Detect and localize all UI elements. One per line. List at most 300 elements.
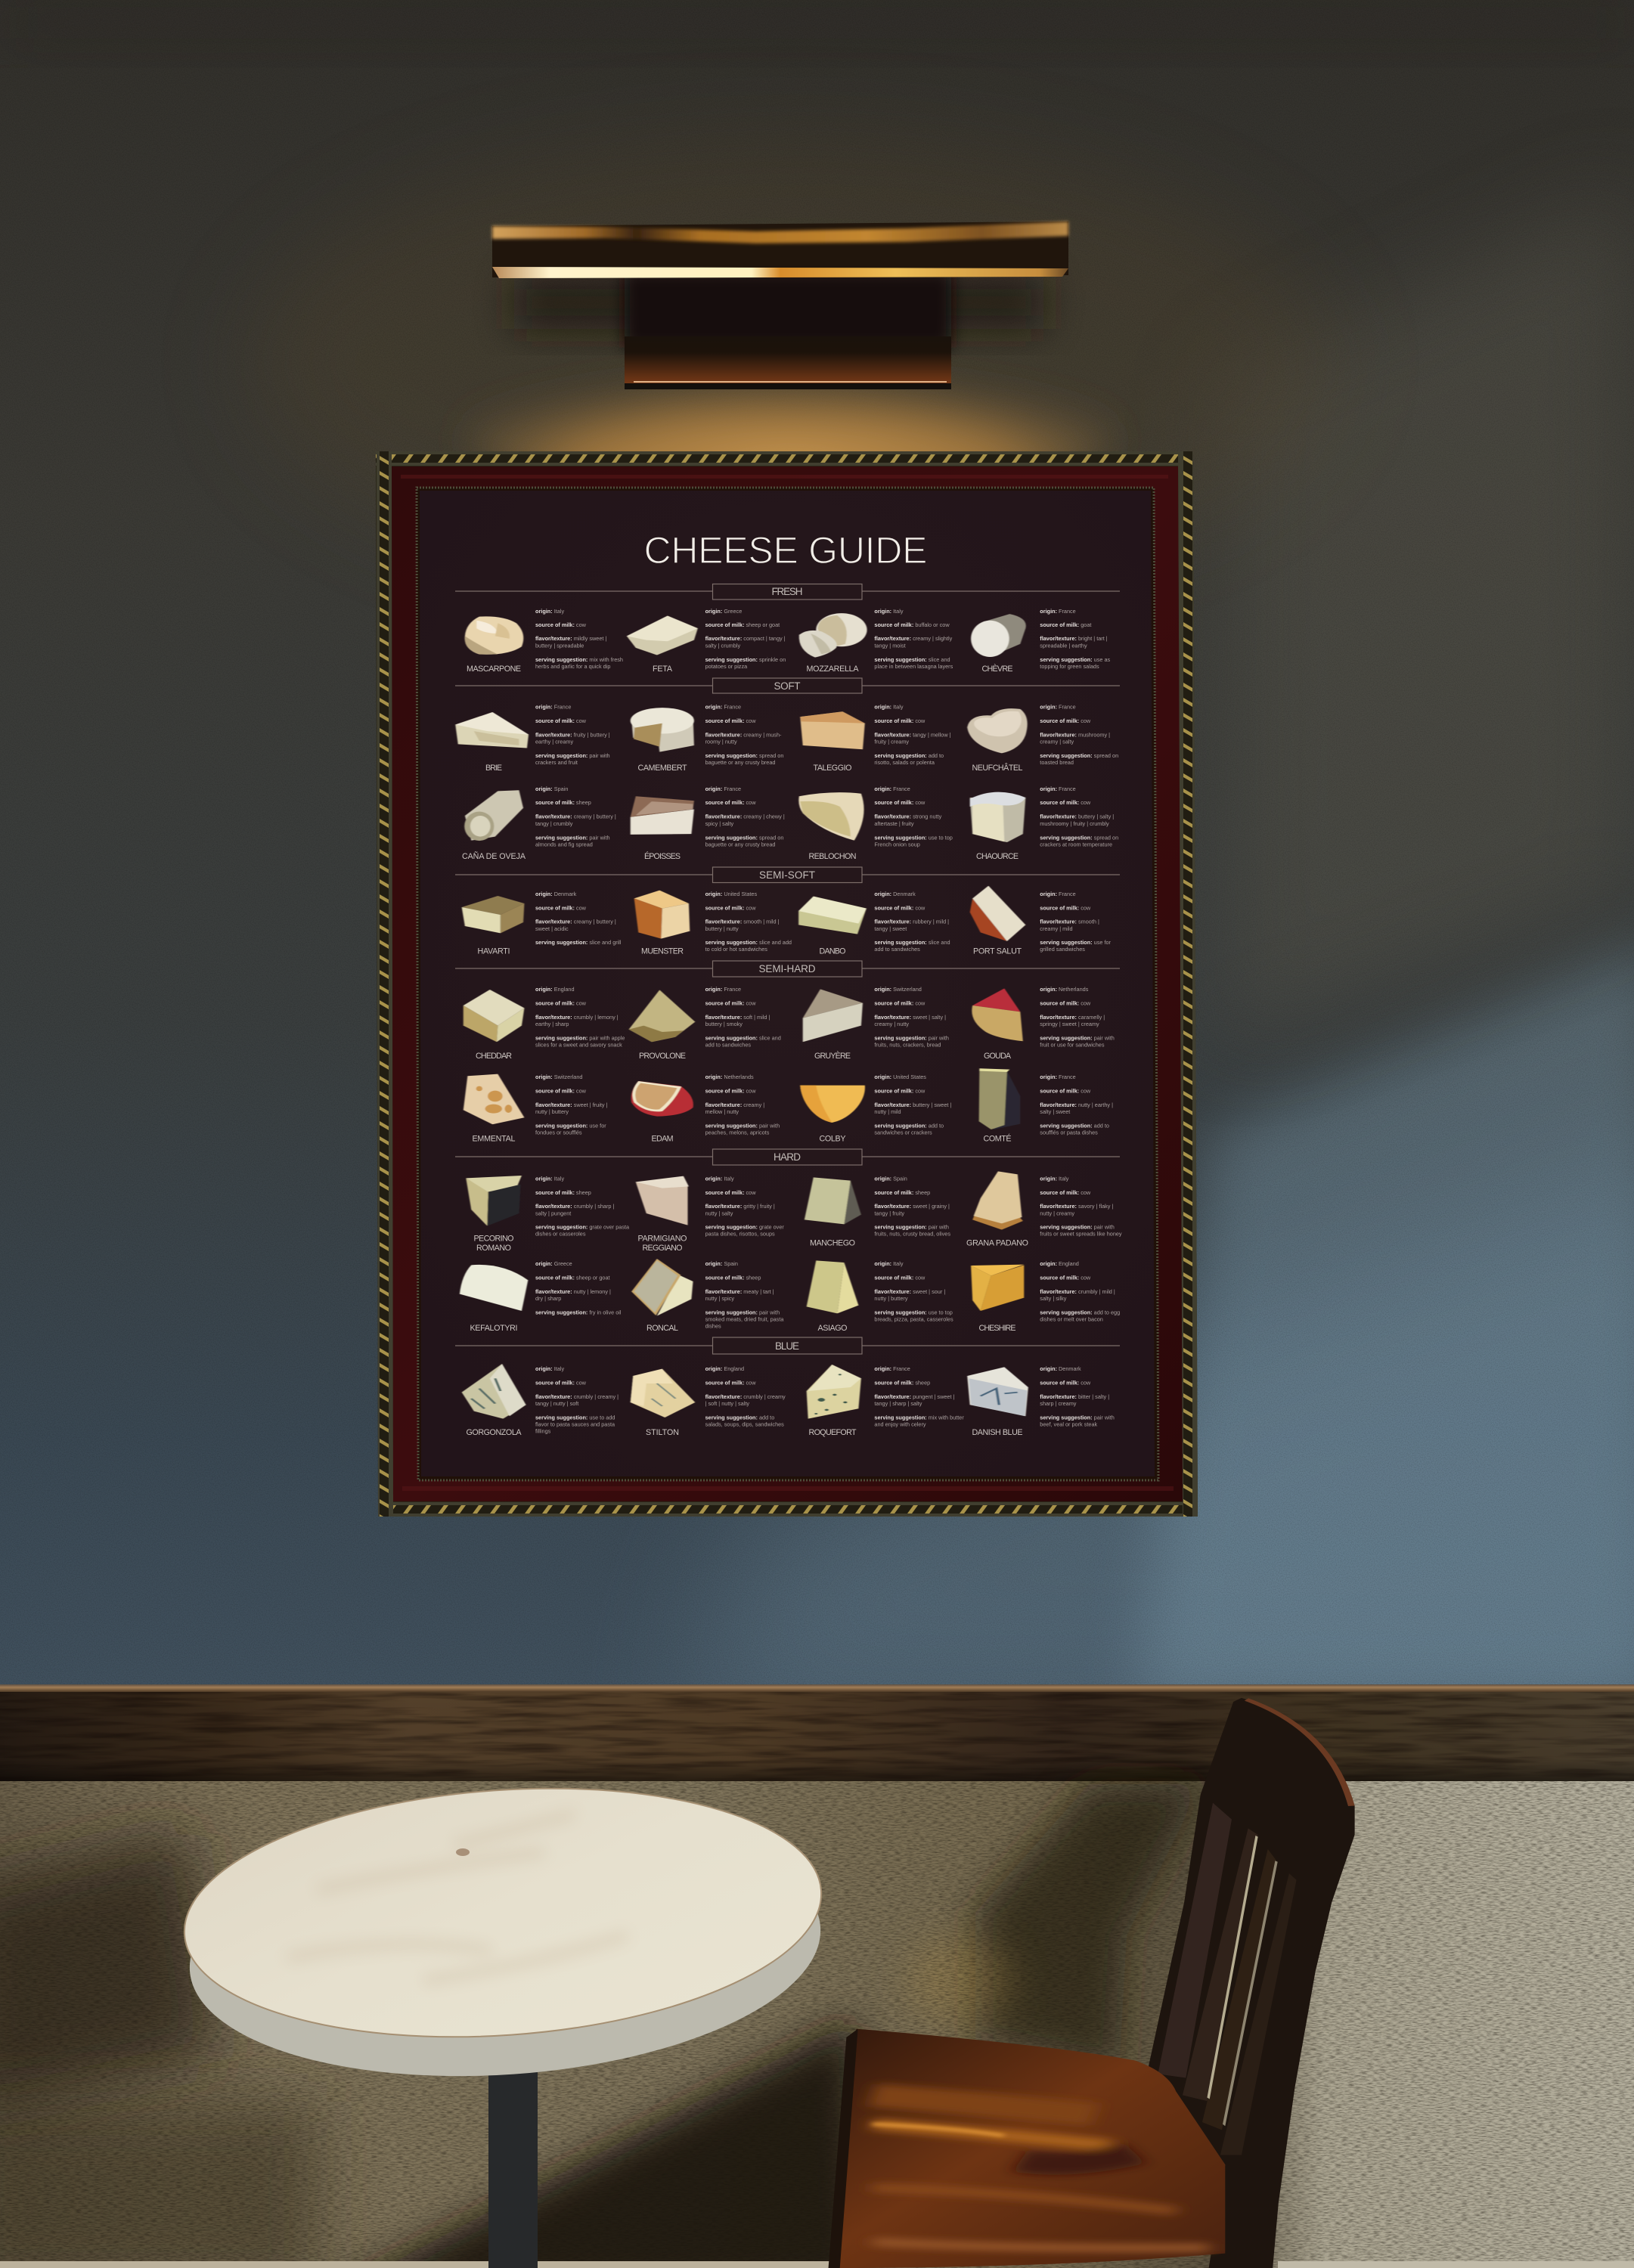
- details: salty | pungent: [535, 1210, 571, 1217]
- details: source of milk: sheep or goat: [705, 621, 780, 628]
- details: tangy | sweet: [874, 925, 907, 932]
- cheese: havarti: [462, 891, 622, 956]
- details: tangy | fruity: [874, 1210, 904, 1217]
- details: flavor/texture: creamy | mush-: [705, 732, 782, 738]
- details: serving suggestion: pair with: [705, 1122, 780, 1129]
- cheese: comte: COMTÉ: [983, 1134, 1012, 1143]
- cheese: neufchatel: [967, 703, 1118, 773]
- cheese: epoisses: ÉPOISSES: [644, 851, 681, 861]
- details: grilled sandwiches: [1040, 946, 1085, 953]
- details: [705, 1074, 780, 1136]
- table: [176, 1768, 829, 2268]
- details: source of milk: sheep: [874, 1379, 930, 1387]
- details: serving suggestion: spread on: [1040, 752, 1118, 759]
- details: origin: France: [535, 703, 571, 711]
- cheese: port salut: [970, 886, 1112, 956]
- cheese: cheddar: [464, 986, 625, 1061]
- details: toasted bread: [1040, 759, 1074, 766]
- background: burlap lower wall: [0, 1781, 1634, 2268]
- details: serving suggestion: sprinkle on: [705, 656, 786, 663]
- details: flavor/texture: bright | tart |: [1040, 635, 1108, 642]
- details: origin: France: [705, 785, 741, 792]
- cheese: grana padano: [966, 1171, 1122, 1247]
- details: herbs and garlic for a quick dip: [535, 663, 610, 670]
- cheese: danish blue: DANISH BLUE: [972, 1428, 1022, 1437]
- details: [535, 1365, 619, 1435]
- details: flavor/texture: crumbly | lemony |: [535, 1014, 619, 1021]
- details: creamy | mild: [1040, 925, 1073, 932]
- details: source of milk: cow: [874, 904, 926, 912]
- section header: blue: [455, 1337, 1120, 1354]
- cheese: kefalotyri: KEFALOTYRI: [470, 1324, 517, 1333]
- lamp arm: [625, 336, 951, 389]
- illustration: [627, 616, 698, 655]
- details: source of milk: cow: [705, 1087, 756, 1095]
- details: [1040, 608, 1111, 670]
- details: sweet | acidic: [535, 925, 569, 932]
- details: [535, 1074, 608, 1136]
- details: flavor/texture: gritty | fruity |: [705, 1203, 775, 1210]
- cheese: gouda: GOUDA: [984, 1052, 1012, 1061]
- details: salty | sweet: [1040, 1108, 1070, 1115]
- details: origin: Italy: [1040, 1175, 1069, 1182]
- cheese: roquefort: [807, 1365, 964, 1437]
- details: origin: Denmark: [874, 891, 916, 897]
- cheese: chevre: CHÈVRE: [981, 664, 1013, 674]
- details: [535, 703, 610, 766]
- details: source of milk: cow: [705, 799, 756, 806]
- details: flavor/texture: mushroomy |: [1040, 732, 1110, 738]
- details: origin: France: [874, 785, 910, 792]
- cheese: chaource: [970, 785, 1118, 861]
- details: [705, 1260, 784, 1329]
- details: origin: Denmark: [535, 891, 577, 897]
- details: origin: Italy: [874, 703, 904, 711]
- details: nutty | buttery: [535, 1108, 569, 1115]
- details: [874, 1365, 964, 1427]
- table top: [176, 1768, 829, 2057]
- details: serving suggestion: pair with: [705, 1309, 780, 1315]
- illustration: [971, 614, 1026, 657]
- details: [535, 1175, 630, 1237]
- cheese: edam: [631, 1074, 780, 1143]
- cheese: mozzarella: [799, 608, 953, 674]
- cheese: camembert: [631, 703, 783, 773]
- details: dishes: [705, 1323, 721, 1329]
- cheese: grana padano: GRANA PADANO: [966, 1238, 1028, 1247]
- details: source of milk: sheep: [535, 799, 591, 806]
- illustration: [462, 896, 524, 933]
- details: [535, 1260, 622, 1315]
- details: baguette or any crusty bread: [705, 841, 775, 848]
- details: [1040, 986, 1115, 1048]
- details: risotto, salads or polenta: [874, 759, 935, 766]
- details: flavor to pasta sauces and pasta: [535, 1421, 615, 1427]
- details: source of milk: cow: [705, 1379, 756, 1387]
- details: flavor/texture: creamy | chewy |: [705, 813, 785, 820]
- details: serving suggestion: use for: [1040, 939, 1112, 946]
- details: creamy | salty: [1040, 738, 1074, 745]
- cheese: gruyere: GRUYÈRE: [814, 1051, 851, 1061]
- details: source of milk: sheep: [705, 1275, 761, 1281]
- cheese: chevre: [971, 608, 1111, 674]
- details: serving suggestion: grate over: [705, 1223, 784, 1231]
- cheese: epoisses: [631, 785, 785, 861]
- cheese: pecorino romano: [466, 1175, 630, 1253]
- lamp head: [492, 222, 1068, 277]
- details: aftertaste | fruity: [874, 820, 914, 827]
- details: serving suggestion: spread on: [1040, 835, 1118, 841]
- details: [874, 703, 951, 766]
- cheese: havarti: HAVARTI: [478, 947, 510, 956]
- details: serving suggestion: pair with apple: [535, 1034, 625, 1042]
- illustration: [462, 1364, 526, 1419]
- details: serving suggestion: add to egg: [1040, 1309, 1120, 1315]
- cheese: gruyere: [803, 986, 949, 1061]
- cheese: roquefort: ROQUEFORT: [809, 1428, 857, 1437]
- details: creamy | nutty: [874, 1021, 909, 1027]
- details: flavor/texture: pungent | sweet |: [874, 1393, 955, 1400]
- cheese: feta: FETA: [653, 665, 673, 674]
- cheese: mascarpone: [465, 608, 623, 674]
- details: fruits or sweet spreads like honey: [1040, 1231, 1122, 1237]
- details: origin: France: [1040, 703, 1076, 711]
- cheese: taleggio: [800, 703, 951, 773]
- details: serving suggestion: pair with: [874, 1223, 949, 1231]
- details: crackers and fruit: [535, 759, 578, 766]
- cheese: danbo: DANBO: [820, 947, 845, 956]
- details: origin: France: [1040, 1074, 1076, 1080]
- details: source of milk: cow: [1040, 999, 1091, 1007]
- cheese: cana de oveja: CAÑA DE OVEJA: [462, 851, 526, 861]
- details: source of milk: cow: [1040, 1087, 1091, 1095]
- details: smoked meats, dried fruit, pasta: [705, 1315, 784, 1323]
- details: flavor/texture: sweet | grainy |: [874, 1203, 950, 1210]
- details: flavor/texture: buttery | salty |: [1040, 813, 1114, 820]
- details: source of milk: sheep: [874, 1189, 930, 1196]
- frame inner bead: [417, 488, 1158, 1480]
- details: source of milk: cow: [535, 621, 587, 628]
- illustration: [967, 708, 1028, 753]
- details: source of milk: cow: [874, 1087, 926, 1095]
- cheese: provolone: [629, 986, 781, 1061]
- details: serving suggestion: pair with: [1040, 1034, 1115, 1042]
- illustration: [979, 1068, 1020, 1129]
- details: tangy | nutty | soft: [535, 1400, 578, 1407]
- details: and enjoy with celery: [874, 1421, 926, 1427]
- details: origin: Switzerland: [874, 986, 922, 993]
- cheese: reblochon: [798, 785, 953, 861]
- details: source of milk: buffalo or cow: [874, 621, 950, 628]
- details: serving suggestion: use to top: [874, 1309, 953, 1315]
- illustration: [631, 796, 694, 835]
- cheese: pecorino romano: PECORINO: [473, 1234, 514, 1243]
- details: serving suggestion: use to add: [535, 1414, 615, 1421]
- details: flavor/texture: creamy | buttery |: [535, 918, 616, 925]
- illustration: [631, 708, 694, 752]
- details: serving suggestion: add to: [874, 1122, 944, 1129]
- details: fruit or use for sandwiches: [1040, 1042, 1105, 1048]
- chair back: [1147, 1698, 1355, 2268]
- chair seat: [839, 2029, 1225, 2268]
- details: [535, 785, 616, 848]
- illustration: [460, 1265, 528, 1311]
- illustration: [970, 886, 1025, 941]
- cheese: brie: [455, 703, 610, 773]
- details: crackers at room temperature: [1040, 841, 1112, 848]
- details: flavor/texture: compact | tangy |: [705, 635, 786, 642]
- details: source of milk: cow: [705, 904, 756, 912]
- cheese: reblochon: REBLOCHON: [809, 852, 856, 861]
- details: source of milk: cow: [1040, 1189, 1091, 1196]
- cheese: manchego: [805, 1175, 950, 1247]
- details: serving suggestion: pair with: [874, 1034, 949, 1042]
- cheese: danish blue: [967, 1365, 1115, 1437]
- details: serving suggestion: add to: [1040, 1122, 1109, 1129]
- details: [535, 608, 623, 670]
- details: to cold or hot sandwiches: [705, 946, 767, 953]
- details: serving suggestion: spread on: [705, 835, 783, 841]
- cheese: muenster: [634, 891, 792, 956]
- details: fruits, nuts, crusty bread, olives: [874, 1231, 950, 1237]
- details: breads, pizza, pasta, casseroles: [874, 1315, 953, 1323]
- details: [874, 1074, 951, 1136]
- illustration: [803, 989, 863, 1042]
- details: beef, veal or pork steak: [1040, 1421, 1097, 1427]
- details: [705, 1175, 784, 1237]
- details: source of milk: sheep: [535, 1189, 591, 1196]
- details: flavor/texture: crumbly | creamy: [705, 1393, 786, 1400]
- details: serving suggestion: mix with butter: [874, 1414, 964, 1421]
- cheese: stilton: STILTON: [646, 1428, 679, 1437]
- details: flavor/texture: tangy | mellow |: [874, 732, 951, 738]
- details: source of milk: cow: [535, 904, 587, 912]
- details: potatoes or pizza: [705, 663, 748, 670]
- details: source of milk: cow: [535, 999, 587, 1007]
- details: origin: United States: [705, 891, 757, 897]
- cheese: asiago: ASIAGO: [818, 1324, 847, 1333]
- details: nutty | buttery: [874, 1295, 908, 1302]
- section header: semi-hard: [455, 961, 1120, 977]
- details: French onion soup: [874, 841, 920, 848]
- details: [1040, 1074, 1113, 1136]
- details: serving suggestion: pair with: [1040, 1414, 1115, 1421]
- details: flavor/texture: meaty | tart |: [705, 1288, 774, 1295]
- illustration: [631, 1259, 693, 1316]
- cheese: gorgonzola: [462, 1364, 619, 1437]
- cheese: parmigiano reggiano: PARMIGIANO: [638, 1234, 687, 1243]
- details: origin: Spain: [874, 1175, 907, 1182]
- cheese: cheddar: CHEDDAR: [476, 1052, 512, 1061]
- details: flavor/texture: smooth |: [1040, 918, 1099, 925]
- details: nutty | creamy: [1040, 1210, 1074, 1217]
- details: [874, 785, 953, 848]
- background: wood rail: [0, 1684, 1634, 1781]
- cheese: emmental: [464, 1074, 608, 1143]
- cheese: brie: BRIE: [485, 764, 502, 773]
- details: flavor/texture: buttery | sweet |: [874, 1101, 951, 1108]
- section header: semi-soft: SEMI-SOFT: [759, 869, 815, 881]
- section header: blue: BLUE: [775, 1340, 799, 1352]
- lamp glow on wall: [465, 355, 1115, 514]
- details: serving suggestion: use as: [1040, 656, 1111, 663]
- cheese: mascarpone: MASCARPONE: [467, 665, 521, 674]
- details: | soft | nutty | salty: [705, 1400, 749, 1407]
- details: pasta dishes, risottos, soups: [705, 1231, 775, 1237]
- details: mellow | nutty: [705, 1108, 739, 1115]
- illustration: [636, 1176, 689, 1225]
- cheese: emmental: EMMENTAL: [472, 1134, 516, 1143]
- illustration: [464, 1074, 524, 1124]
- poster background: [420, 491, 1155, 1476]
- details: flavor/texture: strong nutty: [874, 813, 942, 820]
- details: [535, 891, 622, 946]
- cheese: colby: [800, 1074, 951, 1143]
- details: [874, 608, 953, 670]
- table rim: [181, 1802, 829, 2096]
- details: serving suggestion: pair with: [1040, 1223, 1115, 1231]
- section header: semi-soft: [455, 867, 1120, 883]
- frame mahogany band: [392, 466, 1183, 1501]
- details: origin: Italy: [705, 1175, 734, 1182]
- details: flavor/texture: savory | flaky |: [1040, 1203, 1113, 1210]
- illustration: [805, 1177, 861, 1224]
- chair: [829, 1698, 1355, 2268]
- cheese: gouda: [972, 986, 1115, 1061]
- details: sharp | creamy: [1040, 1400, 1077, 1407]
- details: serving suggestion: use for: [535, 1122, 606, 1129]
- details: springy | sweet | creamy: [1040, 1021, 1099, 1027]
- details: source of milk: cow: [1040, 717, 1091, 724]
- details: origin: Denmark: [1040, 1365, 1081, 1372]
- details: serving suggestion: slice and grill: [535, 939, 622, 946]
- details: serving suggestion: spread on: [705, 752, 783, 759]
- details: soufflés or pasta dishes: [1040, 1129, 1098, 1136]
- details: slices for a sweet and savory snack: [535, 1042, 622, 1048]
- details: origin: Greece: [705, 608, 742, 615]
- cheese: asiago: [807, 1260, 953, 1333]
- details: flavor/texture: creamy | slightly: [874, 635, 953, 642]
- illustration: [967, 1367, 1028, 1416]
- details: nutty | spicy: [705, 1295, 734, 1302]
- title: CHEESE GUIDE: [644, 529, 927, 572]
- details: [705, 1365, 786, 1427]
- details: serving suggestion: slice and: [874, 656, 950, 663]
- details: source of milk: cow: [1040, 1379, 1091, 1387]
- details: dry | sharp: [535, 1295, 561, 1302]
- illustration: [798, 792, 864, 841]
- cheese: stilton: [631, 1365, 786, 1437]
- cheese: feta: [627, 608, 786, 674]
- cheese: comte: [979, 1068, 1113, 1143]
- details: flavor/texture: sweet | fruity |: [535, 1101, 608, 1108]
- details: origin: France: [1040, 785, 1076, 792]
- cheese: roncal: RONCAL: [646, 1324, 678, 1333]
- cheese: cheshire: [971, 1260, 1120, 1333]
- details: origin: England: [535, 986, 575, 993]
- details: source of milk: cow: [874, 717, 926, 724]
- details: sandwiches or crackers: [874, 1129, 932, 1136]
- details: mushroomy | fruity | crumbly: [1040, 820, 1109, 827]
- cheese: chaource: CHAOURCE: [976, 852, 1019, 861]
- background: wall: [0, 0, 1634, 1739]
- details: flavor/texture: mildly sweet |: [535, 635, 606, 642]
- details: salads, soups, dips, sandwiches: [705, 1421, 784, 1427]
- section header: hard: [455, 1149, 1120, 1165]
- details: topping for green salads: [1040, 663, 1099, 670]
- cheese: danbo: [798, 891, 950, 956]
- details: flavor/texture: sweet | sour |: [874, 1288, 945, 1295]
- details: [874, 1260, 953, 1323]
- illustration: [807, 1260, 858, 1313]
- frame rope moulding: [376, 451, 1198, 1517]
- cheese: gorgonzola: GORGONZOLA: [466, 1428, 522, 1437]
- details: origin: France: [705, 703, 741, 711]
- illustration: [807, 1365, 861, 1419]
- details: source of milk: cow: [705, 717, 756, 724]
- details: serving suggestion: pair with: [535, 835, 610, 841]
- details: [1040, 1175, 1122, 1237]
- details: spicy | salty: [705, 820, 734, 827]
- details: source of milk: cow: [1040, 1275, 1091, 1281]
- details: source of milk: cow: [874, 799, 926, 806]
- details: source of milk: cow: [1040, 904, 1091, 912]
- details: serving suggestion: fry in olive oil: [535, 1309, 622, 1315]
- details: source of milk: cow: [874, 1275, 926, 1281]
- details: serving suggestion: pair with: [535, 752, 610, 759]
- section header: fresh: FRESH: [771, 586, 803, 597]
- illustration: [634, 891, 690, 939]
- illustration: [970, 792, 1025, 842]
- details: source of milk: cow: [535, 1379, 587, 1387]
- details: tangy | sharp | salty: [874, 1400, 922, 1407]
- details: [1040, 891, 1112, 953]
- cheese: cheshire: CHESHIRE: [978, 1324, 1016, 1333]
- details: origin: Italy: [535, 1175, 564, 1182]
- details: flavor/texture: smooth | mild |: [705, 918, 780, 925]
- details: flavor/texture: creamy |: [705, 1101, 764, 1108]
- details: [705, 891, 792, 953]
- section header: hard: HARD: [774, 1151, 801, 1163]
- details: [1040, 785, 1118, 848]
- cheese: manchego: MANCHEGO: [810, 1238, 855, 1247]
- details: dishes or melt over bacon: [1040, 1315, 1103, 1323]
- details: origin: Greece: [535, 1260, 572, 1267]
- details: tangy | crumbly: [535, 820, 573, 827]
- details: serving suggestion: use to top: [874, 835, 953, 841]
- illustration: [631, 1081, 693, 1117]
- details: origin: Italy: [874, 1260, 904, 1267]
- details: [874, 891, 950, 953]
- details: source of milk: goat: [1040, 621, 1091, 628]
- details: origin: Italy: [874, 608, 904, 615]
- details: serving suggestion: grate over pasta: [535, 1223, 630, 1231]
- illustration: [455, 712, 529, 748]
- details: serving suggestion: slice and: [874, 939, 950, 946]
- details: dishes or casseroles: [535, 1231, 586, 1237]
- details: buttery | spreadable: [535, 643, 584, 649]
- section header: fresh: [455, 584, 1120, 600]
- details: [535, 986, 625, 1048]
- details: nutty | salty: [705, 1210, 733, 1217]
- poster: [420, 491, 1155, 1476]
- details: origin: France: [705, 986, 741, 993]
- details: fillings: [535, 1427, 551, 1435]
- illustration: [629, 990, 695, 1042]
- cheese: neufchatel: NEUFCHÂTEL: [972, 763, 1023, 773]
- illustration: [465, 616, 523, 655]
- cheese: parmigiano reggiano: REGGIANO: [643, 1244, 682, 1253]
